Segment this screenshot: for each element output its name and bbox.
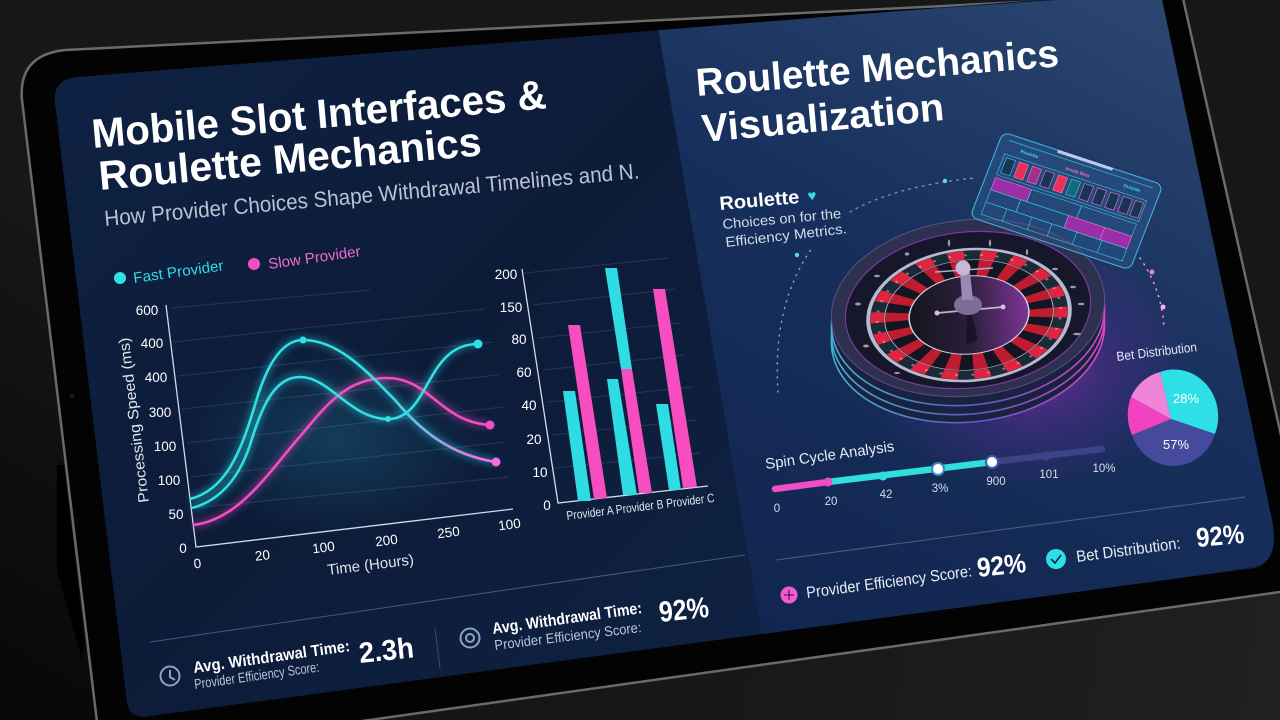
y axis labels: 0 — [179, 541, 187, 556]
stat: provider efficiency: Provider Efficiency Score: — [805, 563, 973, 602]
wheel stacked base — [823, 215, 1113, 436]
icon: check badge — [1046, 549, 1066, 569]
x axis labels: 250 — [436, 524, 461, 541]
x axis labels — [193, 516, 522, 571]
bar axis labels — [495, 267, 551, 513]
table header labels: Outside — [1123, 183, 1141, 193]
series: slow provider — [193, 378, 494, 525]
icon: refresh — [460, 628, 480, 648]
x axis title: Time (Hours) — [326, 551, 415, 579]
bar x labels: Provider A Provider B Provider C — [566, 491, 715, 523]
curve glow — [190, 340, 496, 525]
x axis labels: 0 — [193, 556, 202, 571]
wheel outer rim — [823, 206, 1113, 410]
y axis labels — [136, 303, 187, 556]
pie chart: bet distribution: 57% — [1163, 437, 1189, 452]
camera — [70, 394, 74, 398]
pie chart: bet distribution — [1116, 339, 1218, 466]
bar axis labels: 20 — [526, 432, 542, 447]
y axis labels: 300 — [149, 405, 171, 420]
bar axis labels: 200 — [495, 267, 517, 282]
slider labels: 10% — [1092, 463, 1116, 475]
stat: bet distribution: Bet Distribution: — [1075, 535, 1182, 566]
title: right: Roulette Mechanics — [694, 32, 1061, 105]
table header labels — [1019, 149, 1141, 195]
stat: provider score — [491, 592, 711, 653]
x axis labels: 20 — [254, 547, 271, 564]
panel: right background — [658, 0, 1280, 640]
slider labels: 101 — [1039, 469, 1059, 481]
title: right — [694, 32, 1061, 151]
y axis labels: 100 — [158, 473, 180, 488]
pie chart: bet distribution: 28% — [1173, 391, 1199, 406]
bar axis labels: 60 — [516, 365, 532, 380]
slider labels: 20 — [825, 496, 837, 508]
bar chart — [495, 258, 715, 523]
stat: provider efficiency — [805, 548, 1027, 602]
text block: roulette intro: Roulette — [719, 187, 800, 215]
x axis labels: 100 — [497, 516, 522, 533]
title: left: Roulette Mechanics — [97, 118, 483, 199]
line chart — [116, 290, 522, 579]
wheel ticks — [855, 240, 1084, 374]
y axis labels: 400 — [141, 336, 163, 351]
stat: bet distribution — [1075, 519, 1245, 566]
slider labels: 0 — [774, 503, 780, 515]
series: fast provider A — [190, 336, 500, 499]
table bet grid — [981, 177, 1136, 261]
subtitle: How Provider Choices Shape Withdrawal Timelines and N. — [103, 158, 640, 231]
y axis title: Processing Speed (ms) — [116, 337, 153, 504]
title: right: Visualization — [700, 86, 946, 151]
roulette wheel — [823, 206, 1113, 436]
pie chart: bet distribution: Bet Distribution — [1116, 339, 1198, 364]
x axis labels: 200 — [374, 532, 399, 549]
slider: spin cycle analysis — [764, 438, 1116, 515]
bars — [563, 268, 697, 501]
text block: roulette intro — [719, 187, 848, 250]
bar axis labels: 80 — [511, 332, 527, 347]
dotted orbit arcs — [777, 178, 1166, 392]
stat: average withdrawal time: 2.3h — [357, 632, 415, 670]
stats row left — [150, 555, 745, 692]
text block: roulette intro: Efficiency Metrics. — [725, 220, 848, 250]
legend: Slow Provider — [267, 243, 362, 273]
stat: average withdrawal time: Avg. Withdrawal Time: — [192, 638, 351, 677]
wheel well — [838, 220, 1098, 400]
wheel number track — [863, 241, 1075, 389]
text block: roulette intro: Choices on for the — [722, 205, 842, 232]
bar axis labels: 150 — [500, 300, 522, 315]
stat: provider score: Avg. Withdrawal Time: — [491, 600, 643, 638]
slider: spin cycle analysis: Spin Cycle Analysis — [764, 438, 895, 473]
table header labels: Inside Bets — [1065, 166, 1091, 179]
bar axis labels: 0 — [543, 498, 551, 513]
wheel spindle — [934, 260, 1006, 345]
y axis labels: 100 — [154, 439, 176, 454]
legend — [114, 243, 362, 287]
slider labels: 42 — [880, 489, 892, 501]
bar axis labels: 10 — [532, 465, 548, 480]
text block: roulette intro: ♥ — [807, 187, 817, 205]
stat: provider score: Provider Efficiency Score: — [493, 619, 642, 653]
icon: provider badge — [780, 586, 798, 604]
title: left: Mobile Slot Interfaces & — [90, 71, 548, 157]
stat: average withdrawal time: Provider Efficiency Score: — [193, 659, 320, 692]
icon: clock — [160, 666, 180, 686]
panel: left dashboard — [90, 71, 745, 692]
table number row — [997, 154, 1147, 222]
y axis labels: 600 — [136, 303, 158, 318]
slider labels — [774, 463, 1116, 515]
bar axis labels: 40 — [521, 398, 537, 413]
stat: average withdrawal time — [192, 632, 415, 692]
y axis labels: 50 — [168, 507, 184, 522]
x axis labels: 100 — [311, 539, 336, 556]
y axis labels: 400 — [145, 370, 167, 385]
slider labels: 900 — [986, 476, 1006, 488]
slider labels: 3% — [932, 483, 948, 495]
title: left — [90, 71, 548, 199]
holographic betting table — [970, 132, 1163, 270]
legend: Fast Provider — [132, 257, 225, 287]
stats row right — [776, 497, 1245, 604]
stat: bet distribution: 92% — [1195, 519, 1245, 553]
stat: provider efficiency: 92% — [975, 548, 1027, 583]
table header labels: Roulette — [1020, 149, 1040, 159]
series: fast provider B — [192, 340, 482, 508]
stat: provider score: 92% — [657, 592, 711, 629]
panel: right dashboard — [694, 32, 1245, 604]
